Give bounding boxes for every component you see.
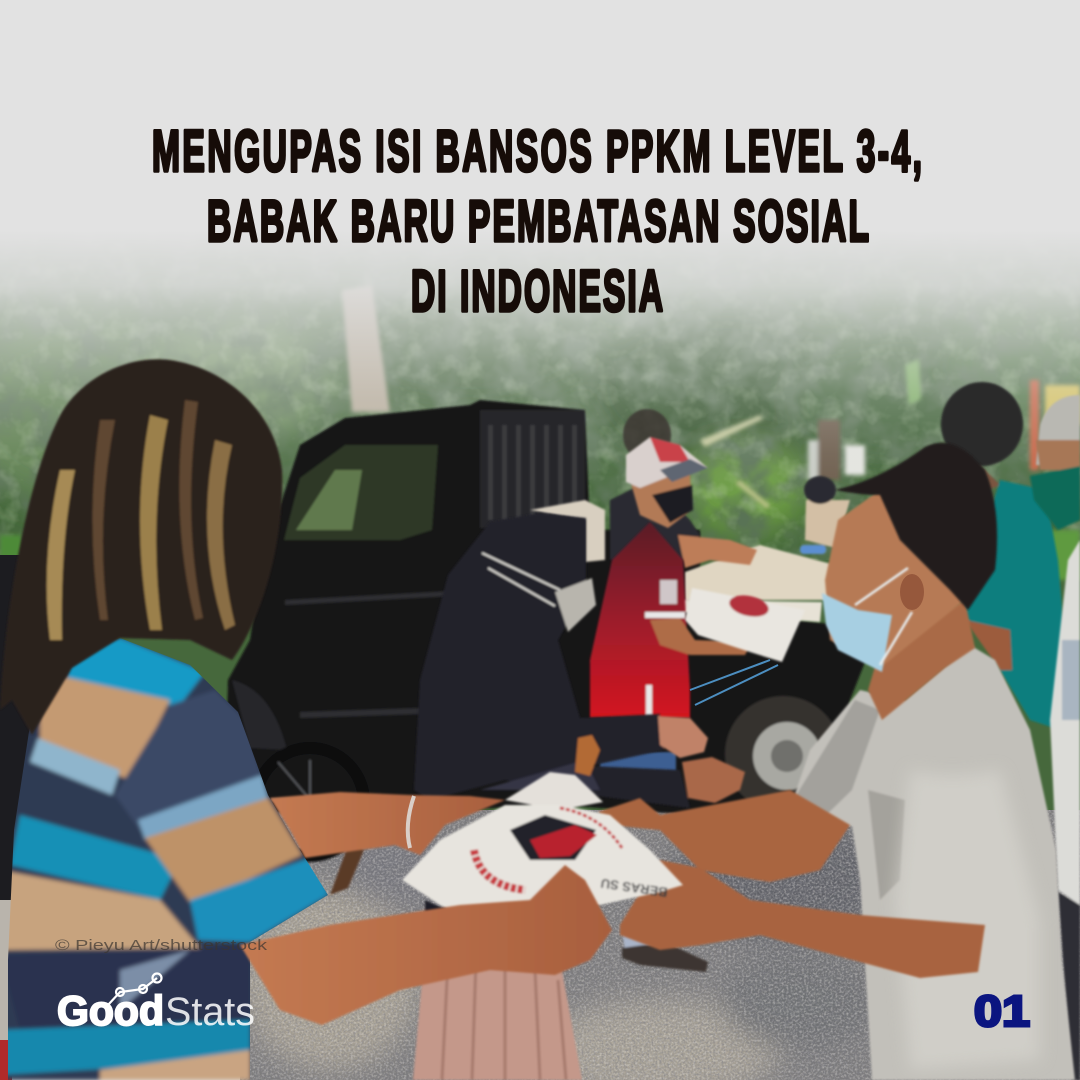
hands: [658, 716, 708, 758]
grey t-shirt: [786, 645, 1075, 1080]
rear dark wheel arch: [232, 680, 287, 750]
boy arm: [650, 618, 752, 655]
teal shirt man: [941, 382, 1063, 730]
left woman's striped shirt: [0, 620, 340, 1080]
left woman's hair: [0, 359, 282, 735]
red and white cap: [626, 437, 708, 488]
sack red and black emblem: [474, 808, 622, 890]
boy head and mask: [630, 475, 692, 528]
front truck wheel: [725, 696, 841, 812]
blue surgical mask: [822, 568, 912, 672]
shirt highlight: [895, 770, 1040, 1070]
hair: [835, 443, 997, 610]
teal mask: [1030, 466, 1080, 530]
photo credit: © Pieyu Art/shutterstock: [55, 937, 268, 954]
face: [825, 490, 965, 668]
neck: [868, 600, 975, 720]
logo: GoodStats: Stats: [165, 990, 255, 1034]
blue ropes: [690, 660, 778, 705]
fade overlay: [0, 230, 1080, 510]
man's arms: [598, 790, 985, 978]
woman in black hijab: [414, 513, 745, 808]
face mask: [555, 578, 596, 632]
truck door details: [285, 590, 470, 718]
title: BABAK BARU PEMBATASAN SOSIAL: [207, 190, 869, 254]
title: MENGUPAS ISI BANSOS PPKM LEVEL 3-4,: [152, 120, 922, 184]
title: DI INDONESIA: [411, 260, 663, 324]
man in grey shirt: [786, 443, 1075, 1080]
gravel ground: [240, 810, 1080, 1080]
left woman's near arm upper: [270, 792, 505, 858]
ear: [900, 574, 924, 610]
logo: GoodStats: [57, 974, 255, 1034]
bracelet: [408, 796, 414, 848]
motorcycle wheel: [256, 748, 364, 895]
person behind boy: [610, 409, 757, 568]
left edge dark strip: [0, 555, 40, 1080]
truck tailgate rack: [480, 410, 585, 528]
jeans and shoes behind: [600, 752, 708, 972]
logo: GoodStats: Good: [57, 987, 164, 1034]
page number: 01: [974, 987, 1030, 1036]
stacked rice sacks on truck bed: [530, 476, 850, 622]
pink pleated skirt: [413, 900, 582, 1080]
sack printed text: BERAS SU: [600, 876, 668, 900]
black pickup truck: [225, 400, 865, 895]
orange bag: [575, 735, 600, 776]
left woman's forearm and hand: [240, 865, 612, 1025]
boy in red jersey: [590, 437, 752, 718]
truck window: [284, 445, 438, 540]
foliage background: [0, 230, 1080, 830]
title: [152, 120, 922, 324]
rice sack held by boy: [685, 588, 805, 662]
rice sack in the centre: [402, 772, 683, 925]
far right man: [1030, 395, 1080, 1080]
